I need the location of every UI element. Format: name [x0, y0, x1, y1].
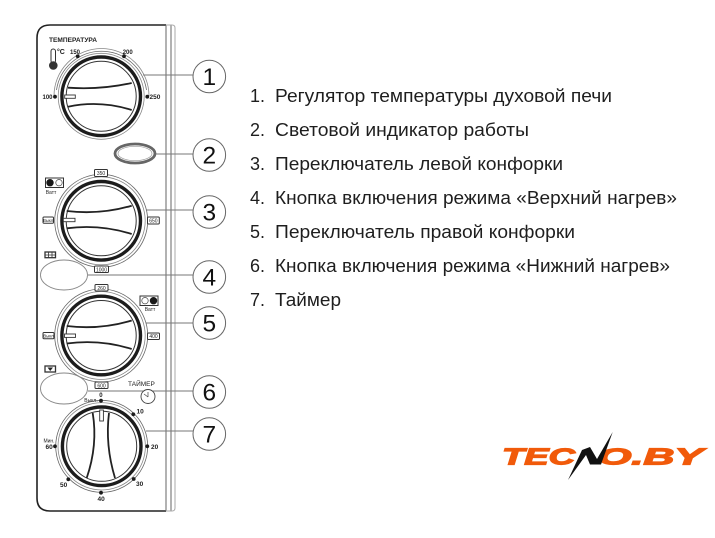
icon: right burner: [140, 296, 158, 313]
logo: TECNO.BY: [502, 432, 707, 480]
legend list: Световой индикатор работы: [275, 120, 529, 140]
dial: timer: Выкл.: [84, 398, 98, 404]
dial: timer: Мин.: [43, 438, 55, 444]
dial: left burner switch: 650: [149, 218, 158, 224]
legend list: Регулятор температуры духовой печи: [275, 86, 612, 106]
legend list: 5.: [250, 222, 265, 242]
callout 5: 5: [202, 310, 216, 338]
dial: timer: [43, 393, 159, 503]
dial: timer: 40: [98, 496, 105, 503]
dial: temperature regulator: 200: [123, 50, 133, 56]
callout 5: [193, 307, 226, 339]
dial: timer: 10: [136, 408, 144, 416]
callout 6: 6: [202, 380, 216, 406]
dial: timer: 0: [99, 393, 103, 399]
control panel outline: [37, 25, 175, 511]
callout 3: [193, 196, 226, 228]
callout 7: [193, 418, 226, 450]
dial: right burner switch: 400: [149, 334, 158, 340]
legend list: Переключатель правой конфорки: [275, 222, 575, 242]
dial: timer: 50: [60, 482, 68, 489]
dial: temperature regulator: 250: [150, 94, 161, 101]
dial: timer: 30: [136, 481, 144, 488]
dial: timer: 60: [46, 444, 53, 451]
callout 4: 4: [202, 264, 216, 292]
legend list: Кнопка включения режима «Нижний нагрев»: [275, 256, 670, 276]
dial: right burner switch: [43, 284, 160, 389]
legend list: 7.: [250, 290, 265, 310]
icon: lightning bolt N: [568, 432, 613, 480]
callout 1: 1: [202, 64, 216, 91]
icon: left burner: Ватт: [46, 190, 57, 196]
legend list: 4.: [250, 188, 265, 208]
callout 2: [193, 139, 226, 171]
heading: temperature: ТЕМПЕРАТУРА: [49, 38, 98, 44]
legend list: Переключатель левой конфорки: [275, 154, 563, 174]
dial: right burner switch: 600: [97, 383, 106, 389]
dial: left burner switch: 1000: [96, 267, 107, 273]
dial: left burner switch: [43, 170, 159, 273]
icon: top heating: [45, 252, 56, 258]
legend list: [250, 86, 677, 310]
legend list: Таймер: [275, 290, 341, 310]
icon: right burner: Ватт: [145, 307, 156, 313]
legend list: 1.: [250, 86, 265, 106]
button: bottom heating: [40, 373, 88, 404]
dial: temperature regulator: 100: [42, 95, 53, 101]
dial: timer: 20: [151, 444, 159, 451]
dial: left burner switch: Выкл: [43, 218, 54, 223]
legend list: 6.: [250, 256, 265, 276]
callout 2: 2: [202, 142, 216, 170]
dial: right burner switch: Выкл: [43, 334, 54, 338]
timer label and clock icon: [128, 379, 155, 404]
icon: left burner: [46, 178, 64, 196]
icon: bottom heating: [45, 366, 56, 372]
callout 3: 3: [202, 200, 216, 226]
legend list: 3.: [250, 154, 265, 174]
dial: temperature regulator: [42, 49, 161, 139]
button: top heating: [40, 260, 88, 290]
legend list: Кнопка включения режима «Верхний нагрев»: [275, 188, 677, 208]
callout 6: [193, 376, 226, 408]
indicator light: [115, 144, 155, 163]
callout 7: 7: [202, 422, 216, 448]
timer label and clock icon: ТАЙМЕР: [128, 379, 155, 388]
icon: thermometer: [49, 48, 65, 70]
dial: temperature regulator: 150: [70, 50, 81, 56]
callout 1: [193, 60, 226, 93]
logo: TECNO.BY: O.BY: [598, 444, 707, 470]
dial: left burner switch: 350: [97, 171, 105, 177]
callout 4: [193, 261, 226, 293]
dial: right burner switch: 260: [97, 286, 106, 292]
leader lines: [88, 75, 193, 431]
icon: thermometer: °C: [57, 48, 65, 56]
legend list: 2.: [250, 120, 265, 140]
logo: TECNO.BY: TEC: [502, 444, 577, 470]
